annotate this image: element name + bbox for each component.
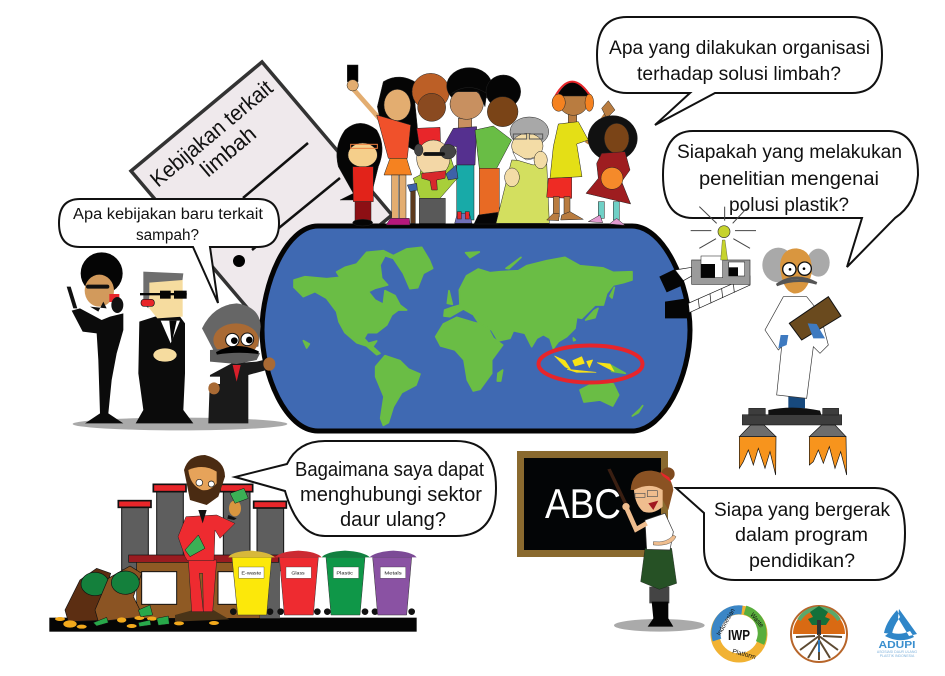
speech bubble: research question: penelitian mengenai <box>699 169 879 190</box>
thrusters and flames <box>739 425 847 475</box>
speech bubble: policy question: sampah? <box>136 227 199 244</box>
old man with scarf and cane <box>407 140 458 223</box>
logo: ADUPI: PLASTIK INDONESIA <box>880 654 915 658</box>
ground <box>49 618 417 632</box>
red glass bin: Glass <box>291 570 305 576</box>
platform <box>742 408 842 425</box>
speech bubble: organisation question: Apa yang dilakukan organisasi <box>609 38 870 59</box>
logo: Indonesian Waste Platform: Platform <box>731 648 756 661</box>
blackboard with ABC: ABC <box>545 480 621 527</box>
world map globe panel <box>262 226 690 431</box>
factory, recycling bins and recycler businessman <box>49 455 417 632</box>
grandmother in green dress <box>496 117 549 223</box>
logo: ADUPI: ADUPI <box>878 640 916 651</box>
speech bubble: policy question: Apa kebijakan baru terkait <box>73 206 264 223</box>
green plastic bin: Plastic <box>336 570 354 576</box>
factory building <box>129 555 280 618</box>
speech bubble: recycling sector question: daur ulang? <box>340 509 446 531</box>
speech bubble: education program question: Siapa yang bergerak <box>714 500 890 521</box>
selfie girl <box>347 65 420 225</box>
scientist body <box>762 248 841 416</box>
scientist on hover platform with flames <box>739 248 847 475</box>
policy document: Kebijakan terkait limbah <box>131 62 392 324</box>
research satellite machine with antenna and tubes <box>659 207 756 318</box>
boy in purple shirt <box>444 68 492 223</box>
speech bubble: education program question <box>676 488 905 580</box>
girl with orange balloon <box>586 116 637 225</box>
chimneys <box>118 484 286 571</box>
logo: Indonesian Waste Platform <box>715 607 765 661</box>
speech bubble: research question: polusi plastik? <box>729 195 849 216</box>
logo: Indonesian Waste Platform: Indonesian <box>716 607 737 637</box>
speech bubble: education program question: dalam program <box>735 525 868 546</box>
bearded official with moustache <box>202 303 275 423</box>
logo: Indonesian Waste Platform: Waste <box>748 612 765 630</box>
agent with afro and phone <box>67 252 123 423</box>
yellow e-waste bin: E-waste <box>241 570 262 576</box>
three government men with shadow <box>67 252 287 430</box>
girl in red with glasses <box>337 123 382 226</box>
red glass bin <box>275 551 322 615</box>
speech bubble: recycling sector question: menghubungi sektor <box>300 484 482 506</box>
money sacks and coins <box>55 566 219 629</box>
dark-skinned boy in green shirt <box>474 75 521 224</box>
logo: ADUPI: ASOSIASI DAUR ULANG <box>877 650 917 654</box>
logo: ADUPI <box>877 609 917 658</box>
teacher with pointer <box>607 467 705 632</box>
speech bubble: education program question: pendidikan? <box>749 551 855 572</box>
orange-haired woman <box>412 73 449 150</box>
blackboard with ABC <box>517 451 668 557</box>
green plastic bin <box>322 551 370 615</box>
speech bubble: organisation question <box>597 17 882 125</box>
policy document: Kebijakan terkait limbah: limbah <box>195 121 261 182</box>
recycling bins with labels <box>228 551 417 615</box>
purple metals bin: Metals <box>384 570 402 576</box>
speech bubble: recycling sector question <box>235 441 496 536</box>
businessman in red suit <box>175 455 248 622</box>
logo: Indonesian Waste Platform: IWP <box>728 627 750 644</box>
logo: ministry of environment and forestry <box>791 606 847 662</box>
speech bubble: recycling sector question: Bagaimana saya dapat <box>295 459 484 481</box>
speech bubble: organisation question: terhadap solusi limbah? <box>637 64 841 85</box>
group of diverse people on top of the globe <box>337 65 637 226</box>
speech bubble: research question: Siapakah yang melakukan <box>677 142 902 163</box>
policy document: Kebijakan terkait limbah: Kebijakan terkait <box>145 75 278 192</box>
purple metals bin <box>369 551 417 615</box>
yellow e-waste bin <box>228 551 275 615</box>
speech bubble: policy question <box>59 199 279 303</box>
boy with orange headphones <box>547 82 615 221</box>
speech bubble: research question <box>663 131 918 267</box>
agent with grey hair and sunglasses <box>136 272 193 423</box>
